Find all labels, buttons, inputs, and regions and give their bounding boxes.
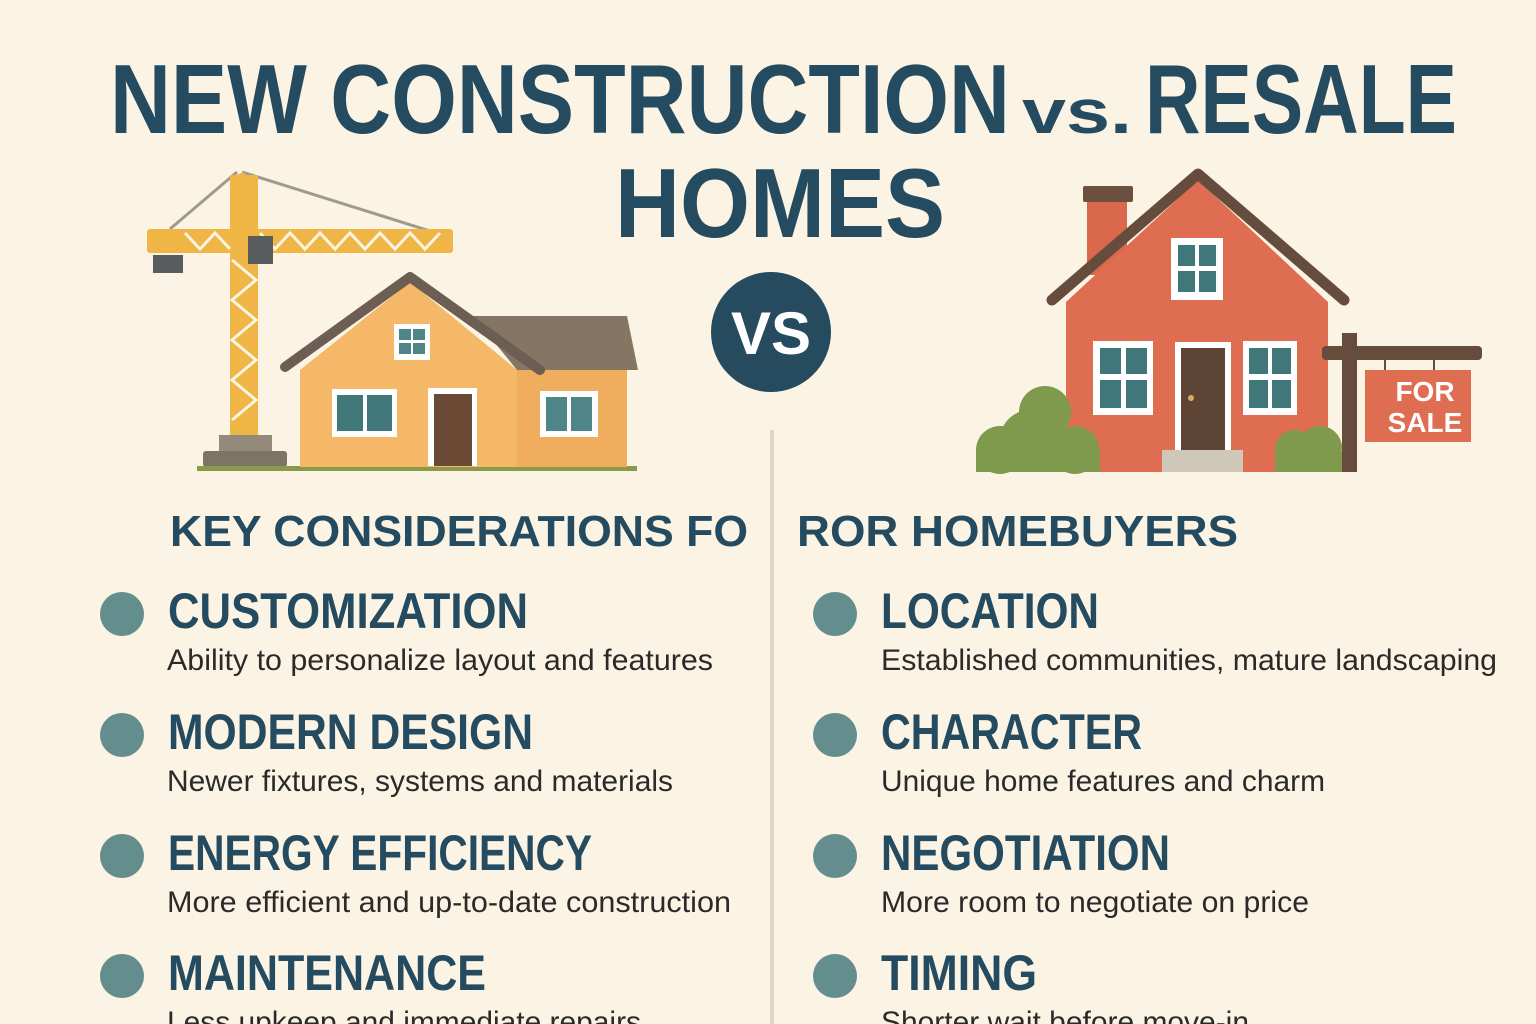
subheading xyxy=(170,507,1238,556)
item: negotiation: NEGOTIATION xyxy=(881,825,1170,881)
panel: new construction list xyxy=(100,583,731,1024)
subheading: ROR HOMEBUYERS xyxy=(797,507,1238,556)
item: customization: Ability to personalize layout and features xyxy=(167,644,713,677)
title: HOMES xyxy=(615,148,945,258)
item: character: CHARACTER xyxy=(881,704,1142,760)
item: energy efficiency: ENERGY EFFICIENCY xyxy=(168,825,592,881)
icon: VS circle: VS xyxy=(731,300,811,367)
title: NEW CONSTRUCTION xyxy=(110,44,1010,154)
item: modern design: MODERN DESIGN xyxy=(168,704,533,760)
item: location: LOCATION xyxy=(881,583,1099,639)
illustration: crane and new house xyxy=(147,172,638,471)
item: customization: CUSTOMIZATION xyxy=(168,583,528,639)
icon: VS circle xyxy=(711,272,831,392)
panel: resale list xyxy=(813,583,1497,1024)
item: customization xyxy=(100,583,713,677)
title: vs. xyxy=(1022,78,1132,147)
item: timing xyxy=(813,945,1249,1024)
item: character: Unique home features and charm xyxy=(881,765,1325,798)
title xyxy=(110,44,1457,258)
item: maintenance xyxy=(100,945,641,1024)
item: energy efficiency: More efficient and up-to-date construction xyxy=(167,886,731,919)
item: energy efficiency xyxy=(100,825,731,919)
illustration: resale house with for sale sign xyxy=(976,174,1482,474)
item: location: Established communities, mature landscaping xyxy=(881,644,1497,677)
item: maintenance: MAINTENANCE xyxy=(168,945,486,1001)
item: modern design xyxy=(100,704,673,798)
item: negotiation: More room to negotiate on price xyxy=(881,886,1309,919)
item: modern design: Newer fixtures, systems and materials xyxy=(167,765,673,798)
item: negotiation xyxy=(813,825,1309,919)
title: RESALE xyxy=(1145,44,1457,154)
illustration: resale house with for sale sign: FOR xyxy=(1395,376,1455,407)
item: location xyxy=(813,583,1497,677)
subheading: KEY CONSIDERATIONS FO xyxy=(170,507,748,556)
item: character xyxy=(813,704,1325,798)
illustration: resale house with for sale sign: SALE xyxy=(1388,407,1462,438)
item: timing: TIMING xyxy=(881,945,1037,1001)
